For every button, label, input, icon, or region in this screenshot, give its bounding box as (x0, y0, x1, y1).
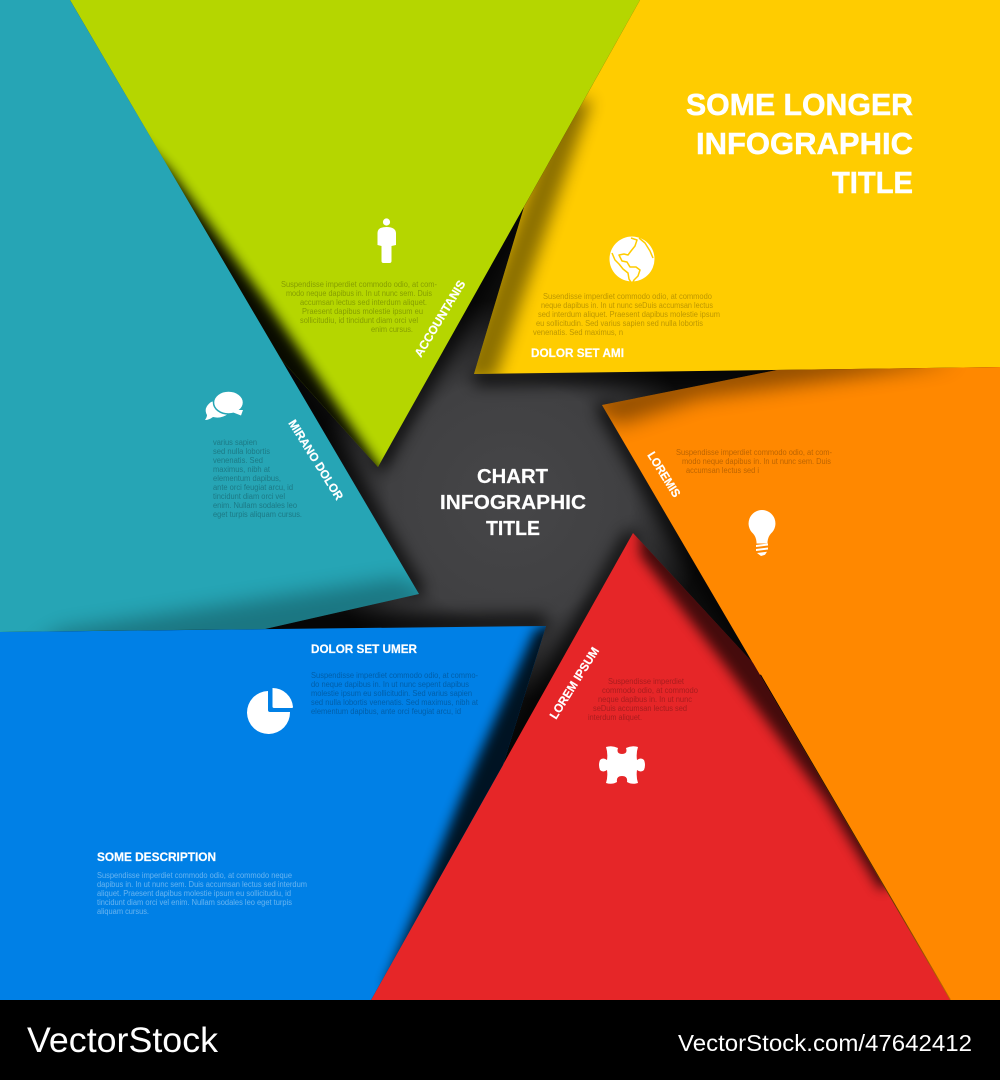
text block: mirano dolor: venenatis. Sed (213, 456, 263, 465)
label: dolor set umer: DOLOR SET UMER (311, 642, 417, 656)
text block: accountants: accumsan lectus sed interdum aliquet. (300, 298, 427, 307)
icon: speech bubbles (205, 391, 244, 420)
text block: dolor set ami: Susendisse imperdiet commodo odio, at commodo (543, 292, 713, 301)
label: dolor set ami: DOLOR SET AMI (531, 346, 624, 360)
main title (686, 87, 913, 200)
text block: accountants: Praesent dapibus molestie ipsum eu (302, 307, 423, 316)
text block: dolor set umer: Suspendisse imperdiet commodo odio, at commo- (311, 671, 478, 680)
text block: mirano dolor (213, 438, 302, 519)
text block: some description (97, 871, 307, 916)
yellow panel surface (460, 0, 1000, 380)
icon: globe (610, 236, 654, 284)
text block: lorem ipsum: interdum aliquet. (588, 713, 642, 722)
center title: TITLE (486, 518, 540, 540)
text block: mirano dolor: elementum dapibus, (213, 474, 281, 483)
footer bar (0, 1000, 1000, 1080)
label: lorem ipsum: LOREM IPSUM (547, 645, 602, 722)
teal panel surface (0, 0, 440, 650)
text block: accountants: modo neque dapibus in. In ut nunc sem. Duis (286, 289, 432, 298)
orange panel surface (580, 350, 1000, 1000)
label: accountanis: ACCOUNTANIS (412, 278, 468, 360)
text block: mirano dolor: maximus, nibh at (213, 465, 271, 474)
text block: accountants (281, 280, 437, 334)
main title: SOME LONGER (686, 87, 913, 122)
center title: CHART (477, 466, 548, 488)
text block: mirano dolor: varius sapien (213, 438, 257, 447)
panel: green accountants (70, 0, 640, 467)
text block: some description: dapibus in. In ut nunc sem. Duis accumsan lectus sed interdum (97, 880, 307, 889)
text block: lorem ipsum: commodo odio, at commodo (602, 686, 699, 695)
text block: dolor set ami: sed interdum aliquet. Praesent dapibus molestie ipsum (538, 310, 720, 319)
text block: dolor set ami: venenatis. Sed maximus, n (533, 328, 623, 337)
center title (440, 466, 586, 540)
text block: dolor set ami: neque dapibus in. In ut nunc seDuis accumsan lectus (541, 301, 713, 310)
panel: red lorem ipsum (365, 520, 955, 1000)
text block: dolor set umer: elementum dapibus, ante orci feugiat arcu, id (311, 707, 461, 716)
label: mirano dolor: MIRANO DOLOR (285, 417, 346, 503)
icon: light bulb (749, 510, 775, 556)
panel: yellow title (460, 0, 1000, 380)
text block: dolor set ami (533, 292, 720, 337)
panel: blue dolor set umer (0, 620, 560, 1000)
text block: dolor set umer: molestie ipsum eu sollicitudin. Sed varius sapien (311, 689, 472, 698)
text block: accountants: Suspendisse imperdiet commodo odio, at com- (281, 280, 437, 289)
text block: lorem ipsum (588, 677, 699, 722)
text block: mirano dolor: ante orci feugiat arcu, id (213, 483, 293, 492)
icon: pie chart (247, 688, 293, 734)
center title: INFOGRAPHIC (440, 492, 586, 514)
blue panel surface (0, 620, 560, 1000)
footer url: VectorStock.com/47642412 (678, 1030, 972, 1056)
text block: loremis: Suspendisse imperdiet commodo odio, at com- (676, 448, 832, 457)
panel: teal mirano dolor (0, 0, 440, 650)
text block: dolor set umer (311, 671, 479, 716)
text block: lorem ipsum: seDuis accumsan lectus sed (593, 704, 687, 713)
text block: loremis: accumsan lectus sed i (686, 466, 759, 475)
red panel surface (365, 520, 955, 1000)
text block: lorem ipsum: neque dapibus in. In ut nunc (598, 695, 692, 704)
text block: mirano dolor: eget turpis aliquam cursus. (213, 510, 302, 519)
panel: orange loremis (580, 350, 1000, 1000)
text block: dolor set umer: sed nulla lobortis venenatis. Sed maximus, nibh at (311, 698, 479, 707)
heading: some description: SOME DESCRIPTION (97, 850, 216, 864)
text block: dolor set umer: do neque dapibus in. In ut nunc sepent dapibus (311, 680, 469, 689)
label: loremis: LOREMIS (644, 449, 683, 500)
text block: dolor set ami: eu sollicitudin. Sed varius sapien sed nulla lobortis (536, 319, 703, 328)
text block: some description: aliquam cursus. (97, 907, 149, 916)
text block: accountants: enim cursus. (371, 325, 413, 334)
text block: mirano dolor: sed nulla lobortis (213, 447, 270, 456)
text block: mirano dolor: enim. Nullam sodales leo (213, 501, 298, 510)
text block: some description: tincidunt diam orci vel enim. Nullam sodales leo eget turpis (97, 898, 292, 907)
footer wordmark: VectorStock (27, 1021, 219, 1060)
text block: some description: Suspendisse imperdiet commodo odio, at commodo neque (97, 871, 293, 880)
text block: loremis (676, 448, 832, 475)
icon: puzzle piece (599, 746, 645, 784)
main title: TITLE (832, 165, 913, 200)
main title: INFOGRAPHIC (696, 126, 913, 161)
green panel surface (70, 0, 640, 467)
text block: lorem ipsum: Suspendisse imperdiet (608, 677, 685, 686)
text block: accountants: sollicitudiu, id tincidunt diam orci vel (300, 316, 418, 325)
text block: some description: aliquet. Praesent dapibus molestie ipsum eu sollicitudiu, id (97, 889, 291, 898)
icon: person (378, 218, 396, 263)
text block: loremis: modo neque dapibus in. In ut nunc sem. Duis (682, 457, 831, 466)
text block: mirano dolor: tincidunt diam orci vel (213, 492, 285, 501)
